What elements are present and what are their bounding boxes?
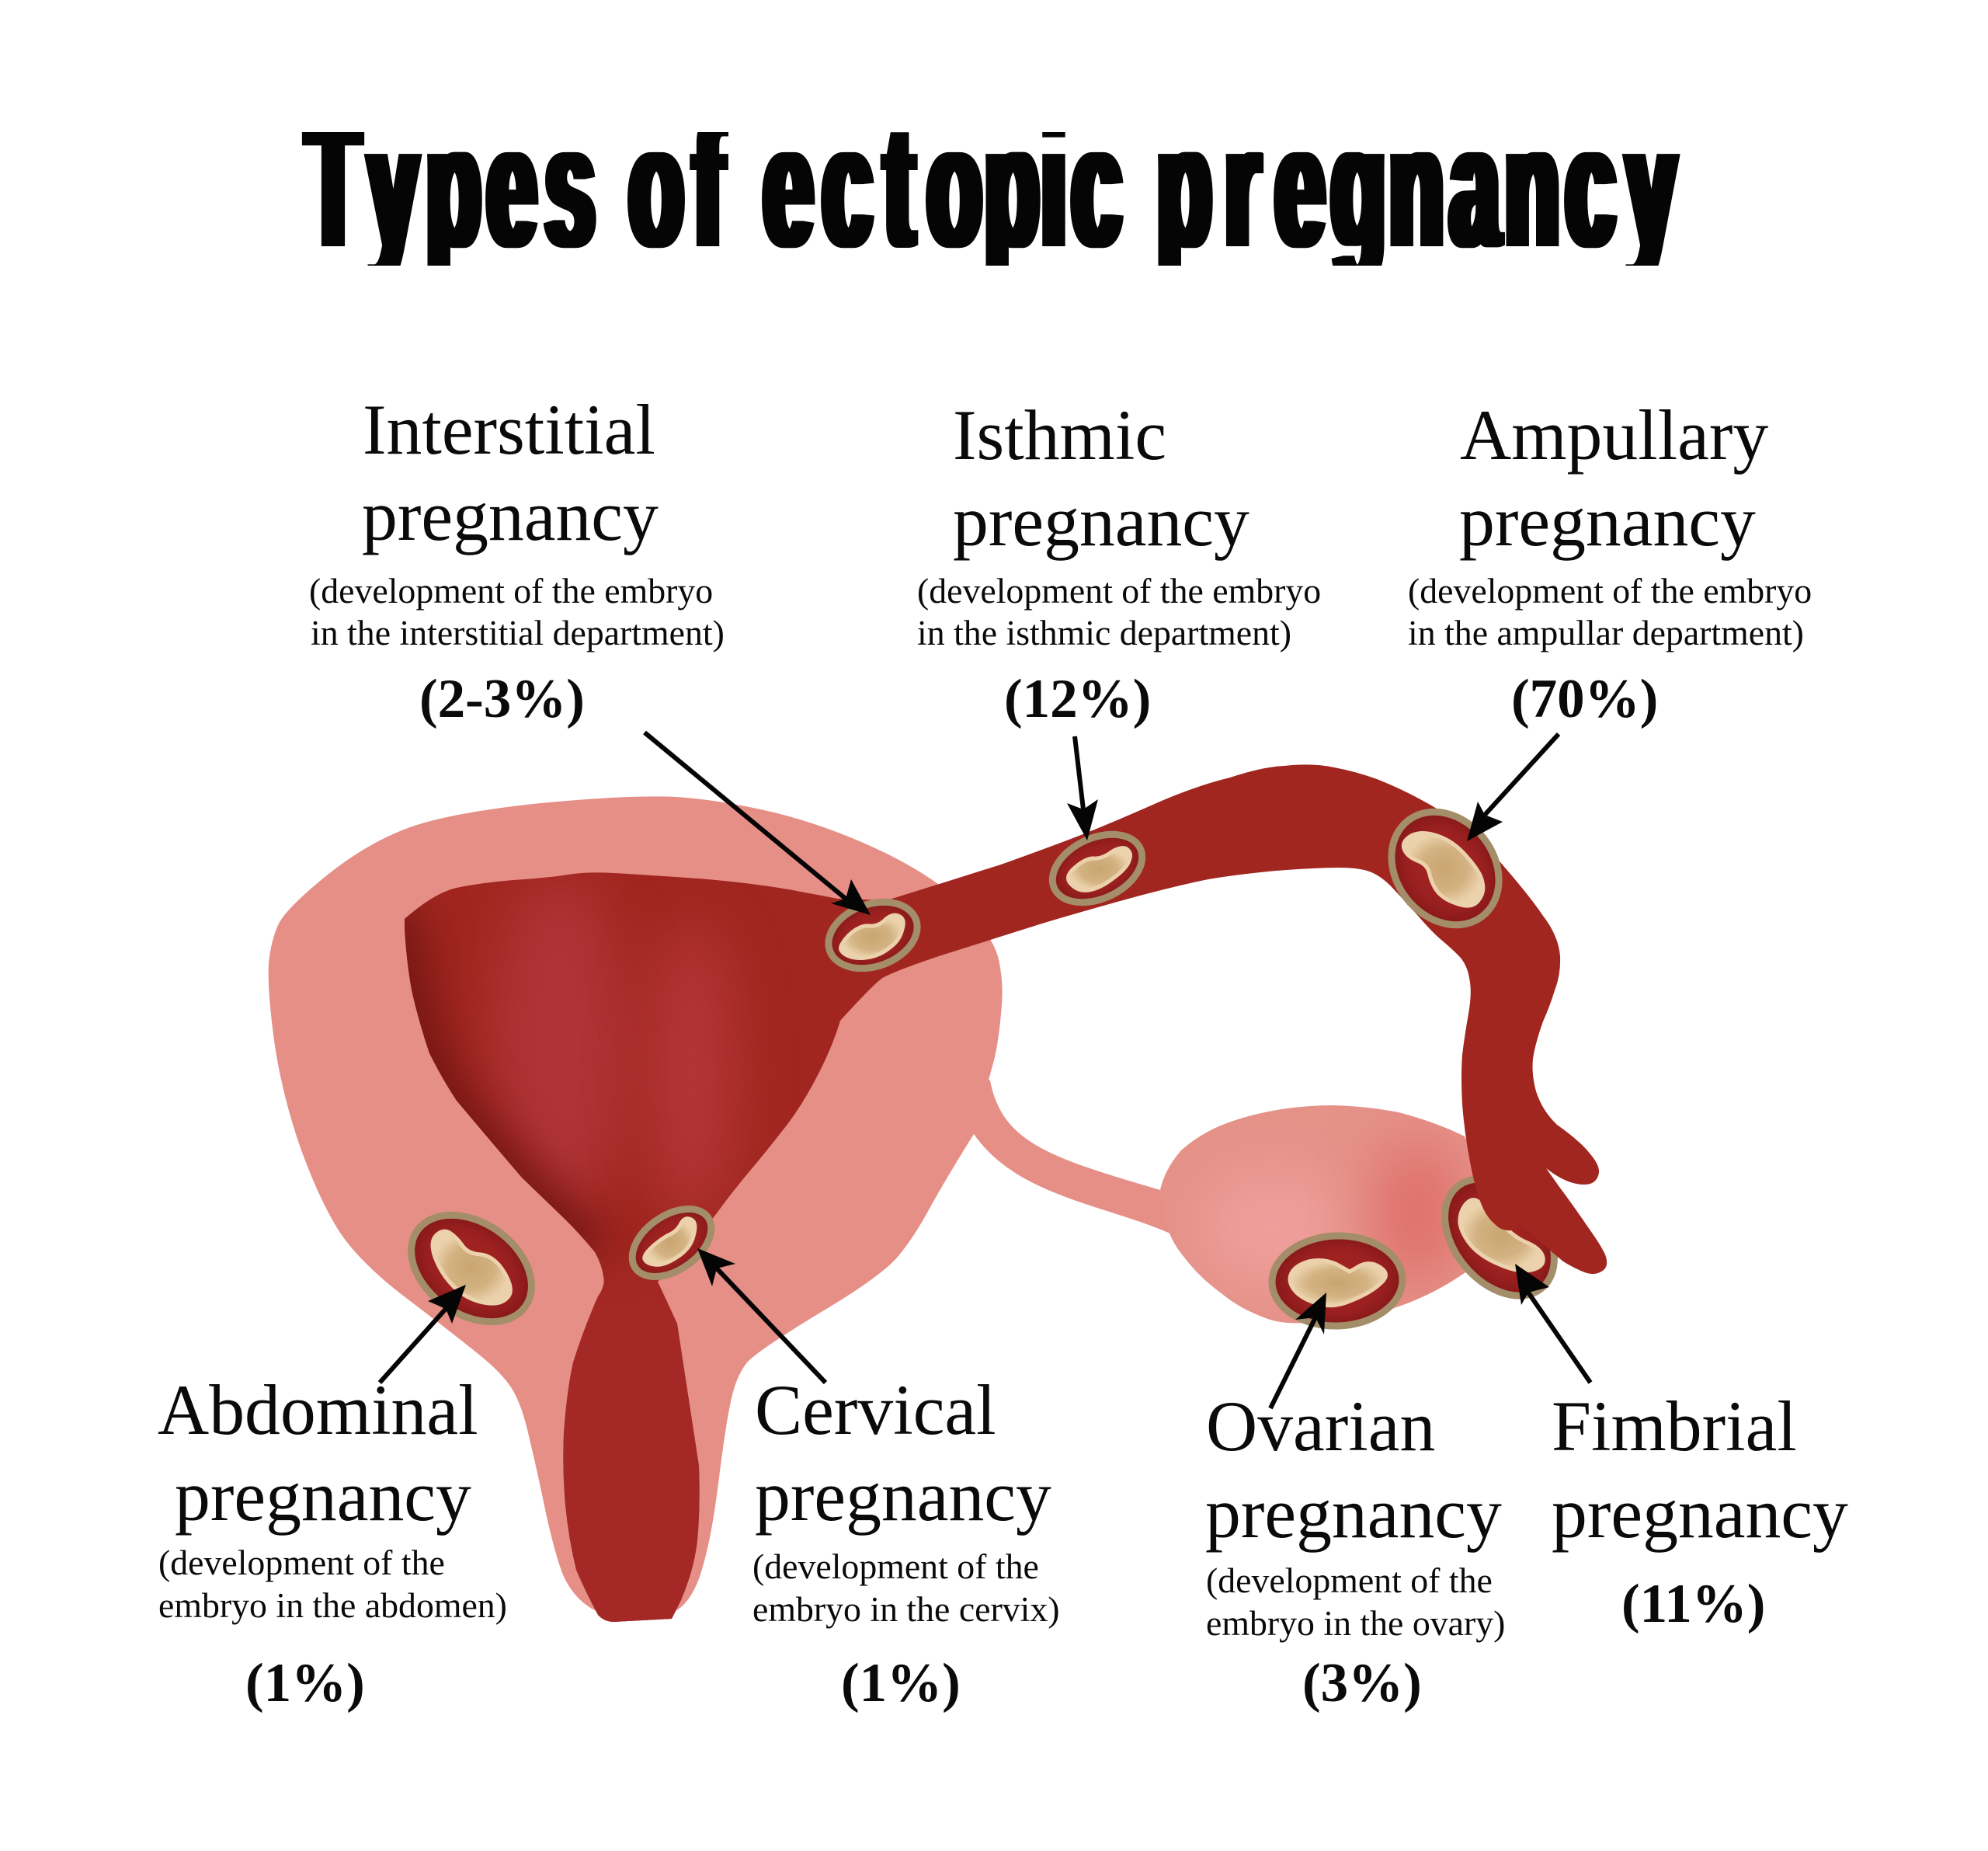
- label: interstitial pregnancy: in the interstitial department): [311, 613, 725, 652]
- label: fimbrial pregnancy: Fimbrial: [1552, 1387, 1797, 1466]
- label: isthmic pregnancy: in the isthmic department): [917, 613, 1291, 652]
- interstitial pregnancy sac: [819, 890, 926, 980]
- label: ovarian pregnancy: pregnancy: [1205, 1473, 1502, 1553]
- label: ovarian pregnancy: embryo in the ovary): [1206, 1603, 1505, 1643]
- label: ampullary pregnancy: in the ampullar department): [1408, 613, 1804, 652]
- label: cervical pregnancy: [752, 1370, 1059, 1714]
- ampullary pregnancy sac: [1369, 791, 1521, 946]
- label: interstitial pregnancy: (2-3%): [419, 669, 585, 729]
- title: Types of ectopic pregnancy: [307, 88, 1675, 284]
- label: fimbrial pregnancy: (11%): [1621, 1574, 1765, 1634]
- cervical pregnancy sac: [620, 1195, 724, 1290]
- label: isthmic pregnancy: (development of the embryo: [917, 571, 1321, 611]
- label: ovarian pregnancy: [1205, 1387, 1505, 1714]
- label: cervical pregnancy: Cervical: [755, 1370, 996, 1449]
- label: cervical pregnancy: (development of the: [752, 1547, 1039, 1586]
- label: abdominal pregnancy: Abdominal: [158, 1370, 478, 1449]
- arrow: cervical: [697, 1248, 825, 1383]
- label: ovarian pregnancy: (3%): [1302, 1653, 1422, 1714]
- anatomy diagram: [269, 764, 1607, 1631]
- label: isthmic pregnancy: pregnancy: [953, 482, 1249, 561]
- arrow: abdominal: [380, 1285, 466, 1383]
- label: interstitial pregnancy: Interstitial: [363, 390, 655, 469]
- label: ampullary pregnancy: (development of the embryo: [1408, 571, 1812, 611]
- label: ovarian pregnancy: Ovarian: [1206, 1387, 1435, 1466]
- label: isthmic pregnancy: Isthmic: [953, 395, 1166, 475]
- label: abdominal pregnancy: (development of the: [158, 1543, 445, 1582]
- arrow: ampullary: [1467, 734, 1559, 841]
- arrow: ovarian: [1270, 1293, 1326, 1408]
- ovarian pregnancy sac: [1270, 1233, 1404, 1328]
- label: fimbrial pregnancy: pregnancy: [1552, 1473, 1848, 1553]
- label: interstitial pregnancy: (development of the embryo: [309, 571, 713, 611]
- pelvic body silhouette: [269, 796, 1003, 1619]
- fimbrial pregnancy sac: [1423, 1158, 1576, 1317]
- label: interstitial pregnancy: pregnancy: [362, 476, 659, 555]
- abdominal pregnancy sac: [391, 1193, 551, 1344]
- uterus: [388, 854, 854, 1631]
- label: ovarian pregnancy: (development of the: [1206, 1560, 1493, 1600]
- label: cervical pregnancy: (1%): [841, 1653, 961, 1714]
- label: cervical pregnancy: embryo in the cervix): [752, 1589, 1059, 1629]
- ovarian ligament: [947, 1064, 1170, 1233]
- ovary: [1160, 1105, 1473, 1324]
- label: interstitial pregnancy: [309, 390, 725, 729]
- arrow: fimbrial: [1515, 1264, 1590, 1383]
- label: isthmic pregnancy: [917, 395, 1321, 729]
- arrow: interstitial: [645, 732, 871, 915]
- label: abdominal pregnancy: (1%): [245, 1653, 365, 1714]
- label: ampullary pregnancy: Ampullary: [1460, 395, 1768, 475]
- label: ampullary pregnancy: pregnancy: [1459, 482, 1756, 561]
- label: fimbrial pregnancy: [1552, 1387, 1848, 1634]
- label: ampullary pregnancy: [1408, 395, 1812, 729]
- arrow: isthmic: [1067, 736, 1098, 840]
- fallopian tube: [823, 764, 1607, 1274]
- infographic canvas: [158, 132, 1848, 1714]
- label: ampullary pregnancy: (70%): [1511, 669, 1658, 729]
- label: abdominal pregnancy: [158, 1370, 507, 1714]
- label: abdominal pregnancy: pregnancy: [175, 1456, 471, 1536]
- label: cervical pregnancy: pregnancy: [755, 1456, 1051, 1536]
- isthmic pregnancy sac: [1041, 821, 1153, 916]
- label: abdominal pregnancy: embryo in the abdomen): [158, 1585, 507, 1625]
- label: isthmic pregnancy: (12%): [1004, 669, 1151, 729]
